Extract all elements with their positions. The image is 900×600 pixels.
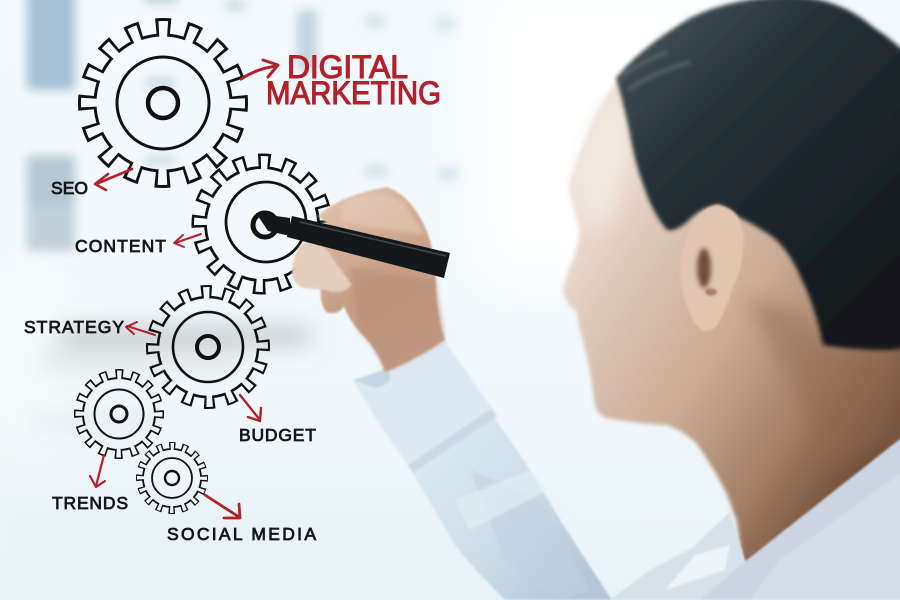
heading: MARKETING: MARKETING xyxy=(266,75,441,111)
label: SOCIAL MEDIA: SOCIAL MEDIA xyxy=(167,524,316,544)
photo: woman's shirt collar xyxy=(610,435,900,600)
label: STRATEGY: STRATEGY xyxy=(24,317,124,337)
gear: fourth xyxy=(78,374,160,454)
photo: woman's neck and face xyxy=(563,80,900,570)
arrow: to SEO xyxy=(95,169,132,190)
label: CONTENT: CONTENT xyxy=(75,236,166,256)
label: TRENDS: TRENDS xyxy=(52,493,128,513)
arrow: to Strategy xyxy=(126,322,155,335)
arrow: to Content xyxy=(174,234,201,247)
arrow: to Budget xyxy=(240,395,261,421)
arrow: to Social Media xyxy=(205,495,240,518)
heading: DIGITAL: DIGITAL xyxy=(287,49,408,85)
arrow: to Trends xyxy=(90,455,105,487)
gear: second xyxy=(198,160,326,288)
photo: woman's ear xyxy=(680,205,744,331)
gear: fifth xyxy=(140,446,204,510)
gear: large top xyxy=(86,26,240,180)
label: SEO: SEO xyxy=(51,178,88,198)
photo: woman's slicked-back hair xyxy=(616,0,900,350)
arrow: to Digital Marketing xyxy=(241,60,278,79)
icon: black marker pen xyxy=(256,213,450,278)
photo: woman's shirt sleeve xyxy=(353,341,612,600)
label: BUDGET: BUDGET xyxy=(239,425,316,445)
photo: woman's hand xyxy=(292,187,445,372)
gear: third xyxy=(152,291,264,403)
